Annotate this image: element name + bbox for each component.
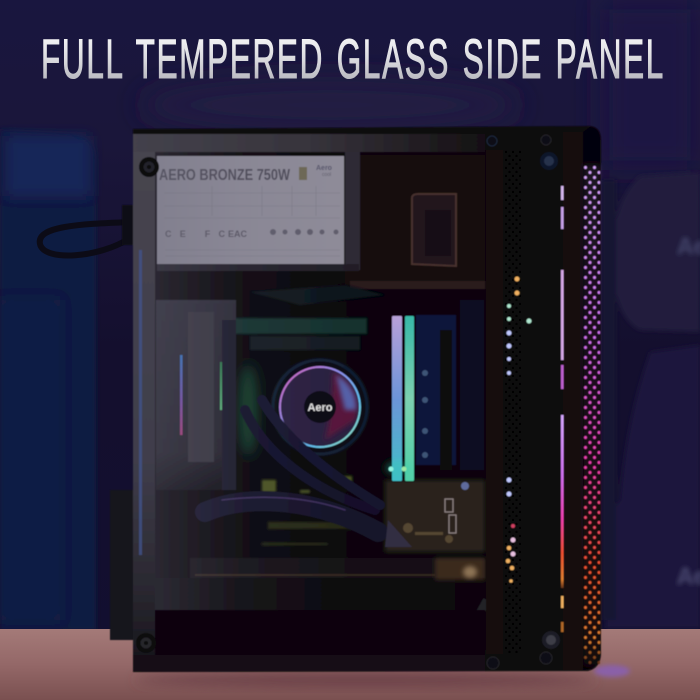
side fan — [156, 300, 236, 490]
case interior — [156, 150, 486, 650]
case screws — [136, 135, 560, 669]
blue reflection strip — [139, 250, 142, 555]
power supply label: AERO BRONZE 750W — [159, 167, 291, 184]
wooden table — [0, 629, 700, 700]
CPU cooler with RGB ring — [270, 357, 370, 457]
front panel LED dots — [506, 276, 532, 583]
right gaming chair — [602, 172, 700, 628]
CPU cooler with RGB ring: Aero — [307, 402, 333, 414]
left blue box — [0, 129, 96, 630]
power supply label: cool — [322, 172, 331, 178]
glass top edge — [133, 134, 485, 152]
green glow — [238, 365, 258, 455]
right case frame — [485, 132, 583, 671]
power supply label — [157, 152, 360, 271]
RAM sticks — [385, 316, 414, 481]
perforated RGB front panel — [583, 127, 600, 670]
glass reflection — [133, 130, 353, 610]
board lower right — [385, 480, 485, 552]
graphics card — [155, 558, 487, 645]
glass left edge — [133, 135, 155, 670]
power supply label: EAC — [228, 229, 248, 239]
PC case — [110, 126, 601, 672]
power supply label: Aero — [316, 165, 332, 172]
power supply label: CE FC — [165, 229, 226, 239]
interior bracket — [412, 194, 456, 266]
vertical LED strip — [561, 186, 564, 632]
liquid cooling tubes — [205, 400, 412, 547]
motherboard — [232, 285, 485, 570]
glass bottom edge — [133, 655, 485, 671]
yellow-green traces — [262, 476, 353, 545]
case body — [133, 126, 601, 672]
power cable — [40, 222, 130, 255]
